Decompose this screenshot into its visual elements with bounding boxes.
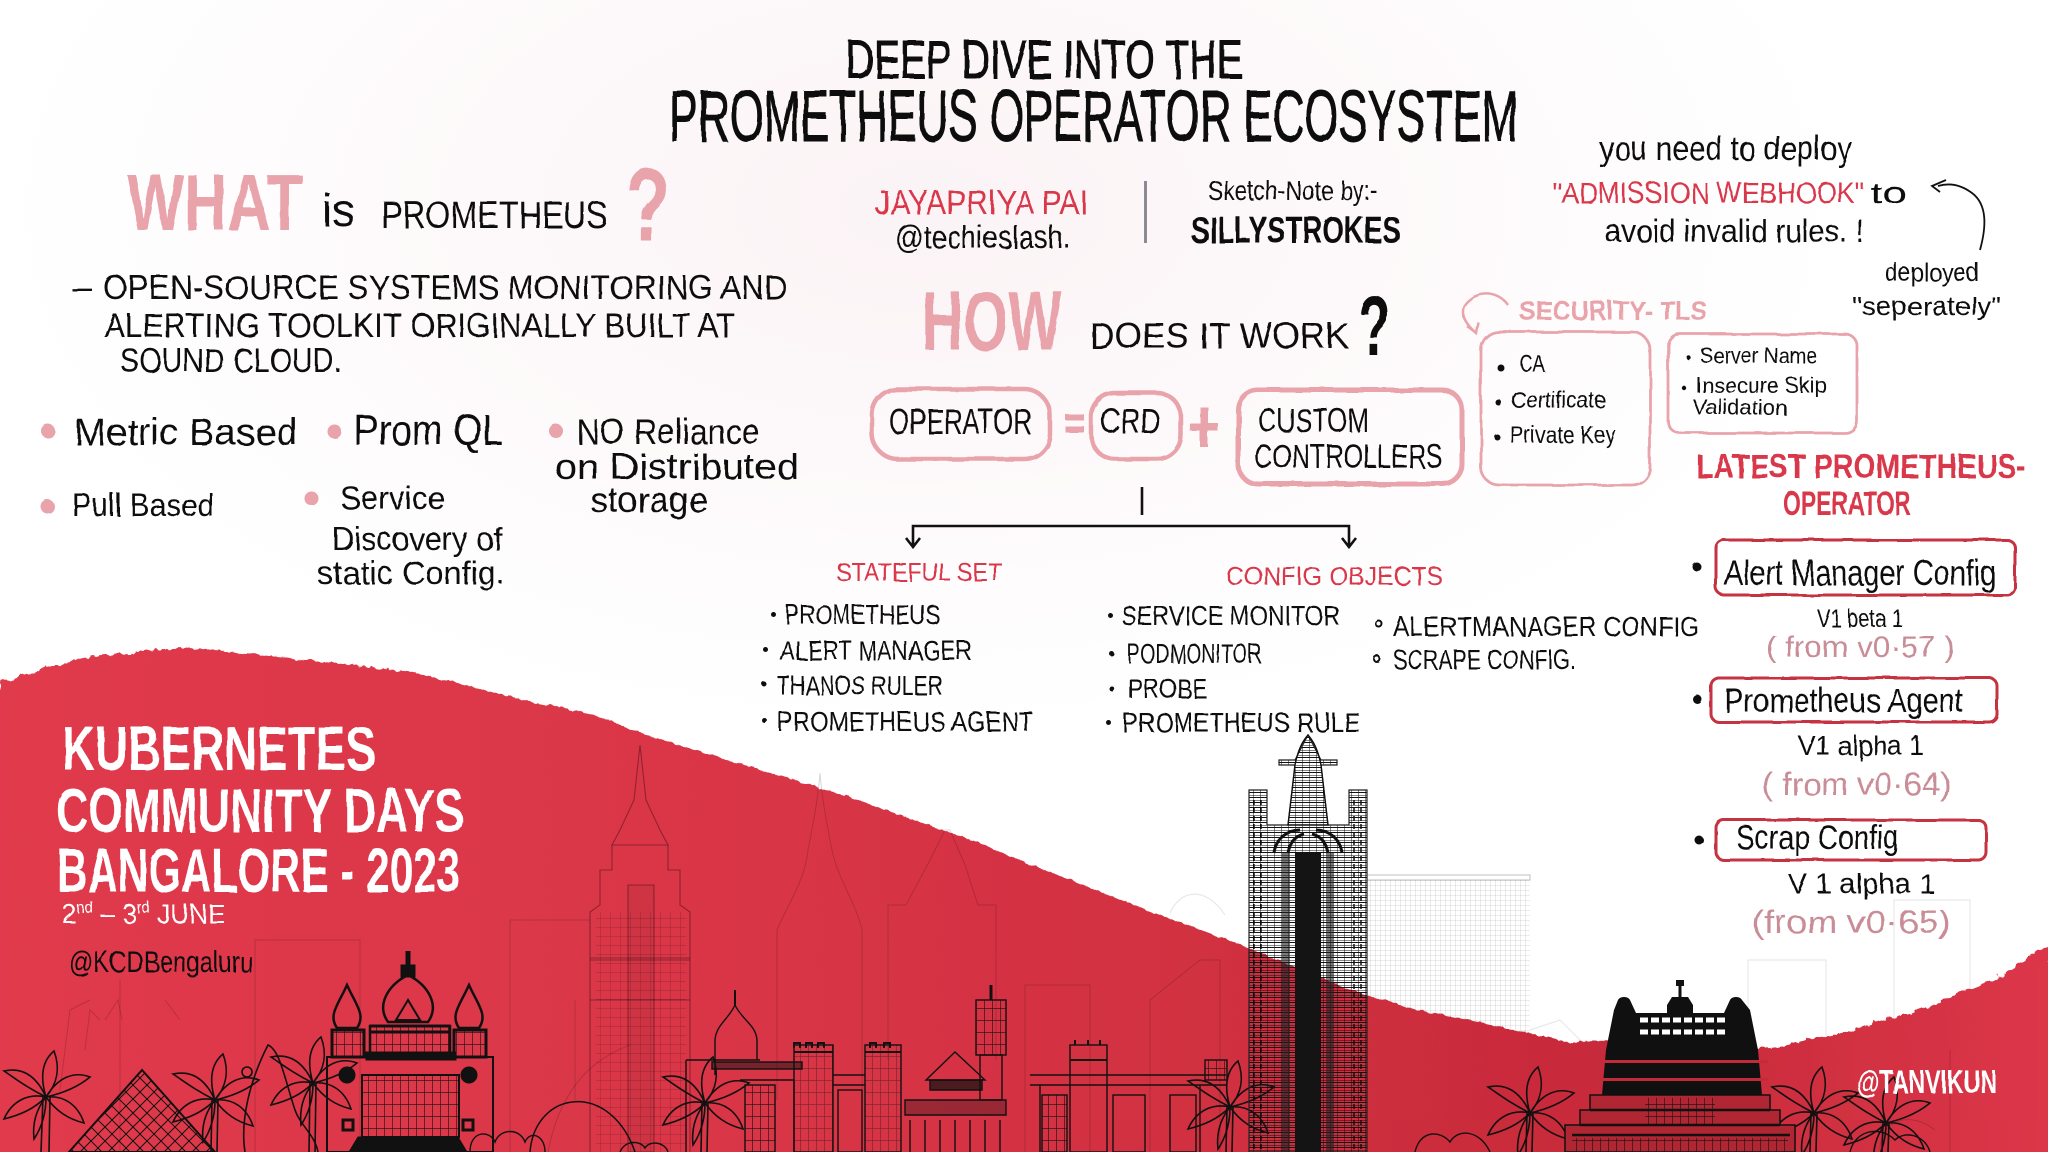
feature bullets: on Distributed <box>555 446 799 487</box>
landmark: tall glass tower <box>1249 735 1367 1152</box>
box: certificate items: CA <box>1520 351 1545 378</box>
event branding: nd <box>76 900 93 917</box>
arrow: security loop <box>1463 294 1508 333</box>
box: server options <box>1668 334 1857 433</box>
landmark: temple <box>1565 980 1795 1152</box>
faint tall tower on red <box>590 745 690 1152</box>
text block: definition: OPEN-SOURCE SYSTEMS MONITORING AND <box>103 269 787 307</box>
list: stateful set: THANOS RULER <box>777 670 943 701</box>
feature bullets: static Config. <box>317 555 505 591</box>
tree connector arrows <box>906 487 1356 547</box>
box: operator <box>872 389 1050 459</box>
artist handle: @TANVIKUN <box>1857 1064 1997 1100</box>
event branding: rd <box>137 900 150 917</box>
feature bullets: storage <box>590 479 708 520</box>
box: server options: Server Name <box>1700 343 1817 368</box>
item: alert manager config <box>1692 540 2015 664</box>
event branding: 2 <box>62 899 77 929</box>
event branding: COMMUNITY DAYS <box>56 777 464 846</box>
box: server options: Insecure Skip <box>1696 373 1827 398</box>
item: scrap config: Scrap Config <box>1736 819 1899 857</box>
event branding: KUBERNETES <box>62 715 376 784</box>
list: config objects: PODMONITOR <box>1127 638 1262 669</box>
box: certificate items: Private Key <box>1510 422 1616 449</box>
box: custom controllers: CUSTOM <box>1258 402 1369 440</box>
heading: what is prometheus: ? <box>626 148 670 264</box>
feature bullets: NO Reliance <box>576 411 760 452</box>
red torn-paper band <box>0 648 2048 1152</box>
feature bullets: Discovery of <box>332 521 502 557</box>
list: config objects <box>1106 561 1699 738</box>
feature bullets: Prom QL <box>354 406 503 455</box>
light grid building <box>1367 875 1530 1152</box>
item: alert manager config: ( from v0·57 ) <box>1766 631 1955 664</box>
heading: what is prometheus: PROMETHEUS <box>381 195 608 237</box>
callout: admission webhook <box>1552 130 1907 249</box>
panel: latest prometheus operator <box>1692 448 2026 940</box>
note: deployed separately: "seperately" <box>1852 291 2001 321</box>
item: scrap config <box>1694 819 1986 940</box>
text block: definition: – <box>72 266 92 307</box>
note: deployed separately <box>1852 257 2001 321</box>
equals sign <box>1065 417 1084 429</box>
box: custom controllers <box>1238 390 1462 484</box>
list: config objects: SERVICE MONITOR <box>1121 600 1340 631</box>
list: stateful set <box>762 557 1033 737</box>
text block: definition: SOUND CLOUD. <box>120 342 342 380</box>
heading: security tls: SECURITY- TLS <box>1519 295 1707 326</box>
plus sign <box>1190 407 1218 447</box>
divider <box>1144 181 1147 243</box>
item: alert manager config: V1 beta 1 <box>1817 605 1903 633</box>
title: DEEP DIVE INTO THE <box>846 30 1243 90</box>
list: stateful set: PROMETHEUS <box>785 599 940 630</box>
list: config objects: CONFIG OBJECTS <box>1226 561 1443 591</box>
event branding: @KCDBengaluru <box>69 946 253 979</box>
faint skyline outlines on red <box>60 773 1950 1152</box>
event branding: JUNE <box>150 899 225 929</box>
item: prometheus agent: Prometheus Agent <box>1724 682 1963 720</box>
title <box>669 30 1518 157</box>
item: prometheus agent: V1 alpha 1 <box>1798 730 1924 761</box>
heading: what is prometheus: WHAT <box>127 158 303 247</box>
feature bullets: Service <box>340 480 445 516</box>
equation: operator = crd + custom controllers <box>872 389 1462 484</box>
landmark: pyramid <box>69 1070 215 1152</box>
callout: admission webhook: avoid invalid rules. ! <box>1605 213 1864 249</box>
heading: what is prometheus <box>127 148 670 264</box>
callout: admission webhook: you need to deploy <box>1599 130 1852 168</box>
box: server options: Validation <box>1693 395 1787 420</box>
speaker credit <box>875 184 1088 255</box>
speaker credit: @techieslash. <box>895 219 1071 255</box>
callout: admission webhook: "ADMISSION WEBHOOK" <box>1552 177 1864 210</box>
box: operator: OPERATOR <box>889 401 1032 442</box>
security tls panel <box>1463 294 1857 485</box>
item: prometheus agent: ( from v0·64) <box>1762 766 1951 802</box>
note: deployed separately: deployed <box>1885 257 1979 287</box>
text block: definition: ALERTING TOOLKIT ORIGINALLY BUILT AT <box>104 307 735 345</box>
arrow: deployed separately <box>1932 180 1984 250</box>
list: stateful set: ALERT MANAGER <box>780 635 972 666</box>
item: prometheus agent <box>1692 678 1997 802</box>
panel: what is Prometheus <box>41 148 799 591</box>
heading: how does it work: ? <box>1358 279 1391 373</box>
feature bullets <box>41 406 799 591</box>
low shrubs <box>470 1131 1930 1152</box>
list: config objects: SCRAPE CONFIG. <box>1393 644 1576 675</box>
item: scrap config: V 1 alpha 1 <box>1788 868 1935 899</box>
heading: how does it work: DOES IT WORK <box>1089 315 1349 356</box>
box: certificate items: Certificate <box>1511 387 1606 414</box>
box: custom controllers: CONTROLLERS <box>1254 438 1443 476</box>
sketch-note credit <box>1191 175 1401 252</box>
feature bullets: Pull Based <box>72 487 214 523</box>
list: stateful set: STATEFUL SET <box>836 557 1002 587</box>
landmark: palace <box>530 985 1227 1152</box>
heading: latest prometheus operator: OPERATOR <box>1783 485 1911 523</box>
event branding: BANGALORE - 2023 <box>57 837 460 906</box>
list: config objects: PROMETHEUS RULE <box>1122 707 1360 738</box>
heading: how does it work: HOW <box>922 274 1062 368</box>
heading: how does it work <box>922 274 1391 373</box>
heading: latest prometheus operator <box>1696 448 2026 523</box>
callout: admission webhook: to <box>1870 177 1907 210</box>
heading: what is prometheus: is <box>322 184 355 236</box>
list: config objects: PROBE <box>1128 673 1207 704</box>
landmark: Vidhana Soudha <box>327 951 493 1152</box>
event branding: – 3 <box>93 899 137 929</box>
box: crd <box>1091 393 1181 459</box>
faint background buildings on white <box>1170 894 1970 1152</box>
speaker credit: JAYAPRIYA PAI <box>875 184 1088 222</box>
feature bullets: Metric Based <box>74 412 298 454</box>
sketch-note credit: Sketch-Note by:- <box>1208 175 1378 206</box>
event branding <box>56 715 464 979</box>
list: config objects: ALERTMANAGER CONFIG <box>1393 611 1699 642</box>
text block: definition <box>72 266 787 380</box>
icons: palm trees <box>4 1037 1930 1152</box>
list: stateful set: PROMETHEUS AGENT <box>777 706 1033 737</box>
box: crd: CRD <box>1100 400 1160 441</box>
box: certificate items <box>1481 332 1650 485</box>
title: PROMETHEUS OPERATOR ECOSYSTEM <box>669 77 1518 157</box>
sketch-note credit: SILLYSTROKES <box>1191 210 1401 252</box>
item: scrap config: (from v0·65) <box>1752 904 1951 940</box>
landmark: rock statue <box>242 1045 318 1152</box>
